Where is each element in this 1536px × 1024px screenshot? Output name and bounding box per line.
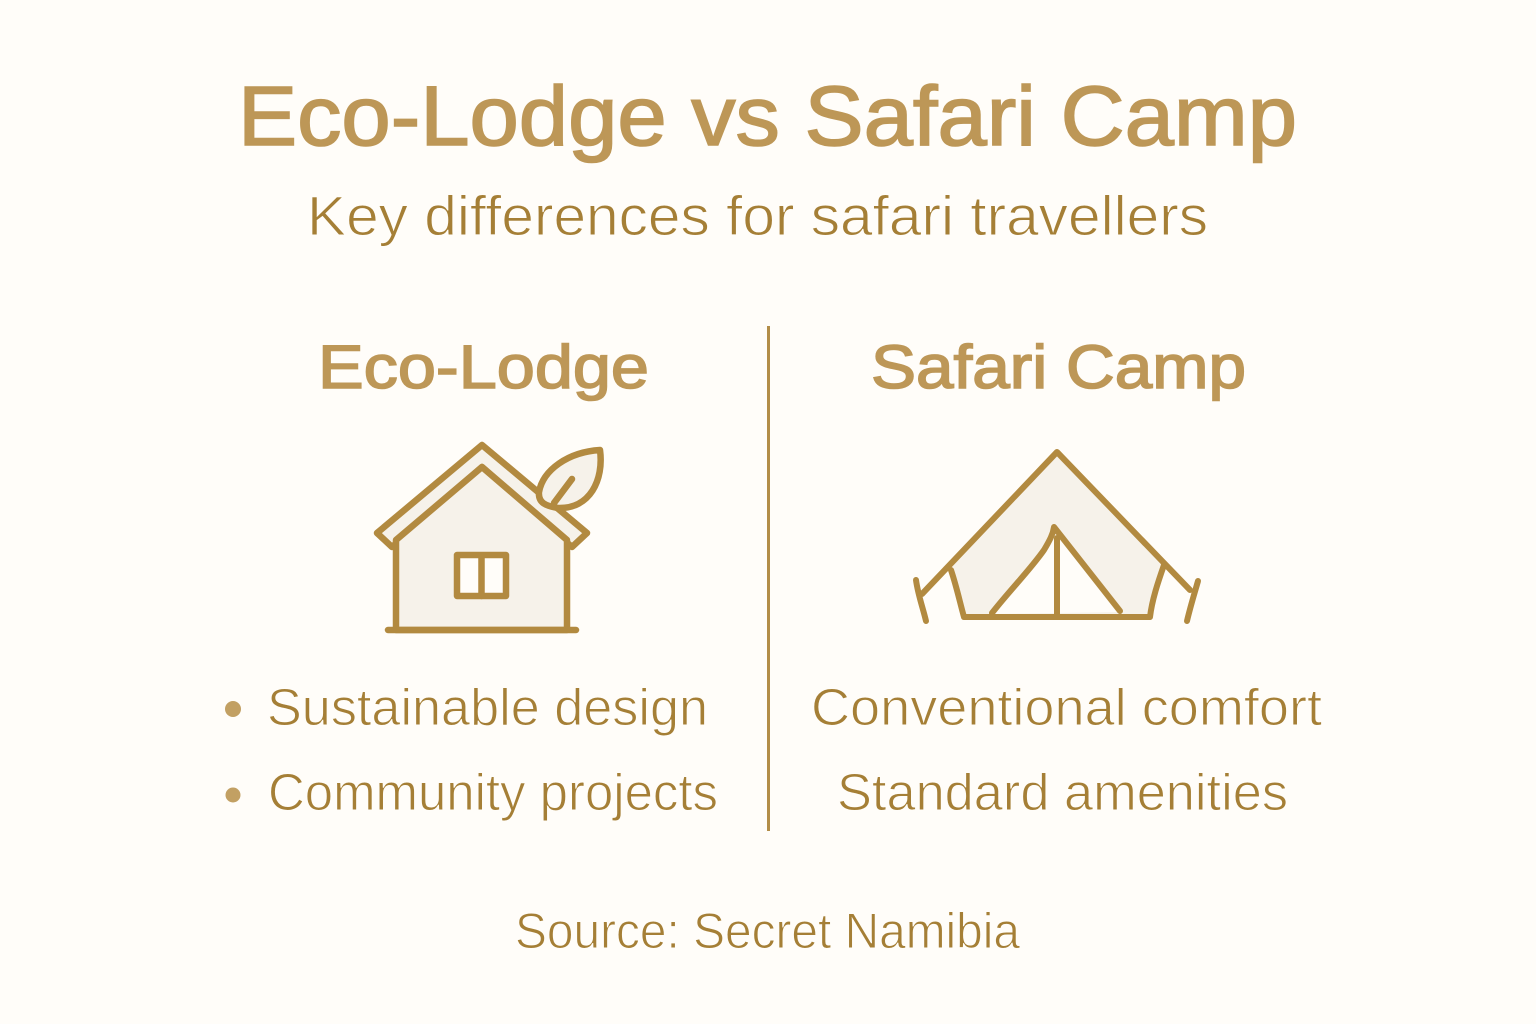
- subtitle: Key differences for safari travellers: [307, 184, 1208, 247]
- feature: standard amenities: Standard amenities: [837, 764, 1288, 822]
- title: Eco-Lodge vs Safari Camp: [238, 69, 1297, 163]
- feature list: safari camp: [811, 679, 1323, 822]
- source note: Source: Secret Namibia: [515, 903, 1020, 959]
- icon: tent: [916, 452, 1198, 621]
- feature: sustainable design: Sustainable design: [267, 679, 708, 737]
- bullet: [226, 788, 240, 802]
- feature: conventional comfort: Conventional comfort: [811, 679, 1323, 737]
- center divider: [767, 326, 770, 831]
- bullet list: eco-lodge features: [225, 679, 718, 822]
- panel: eco-lodge: [225, 333, 718, 822]
- heading: safari camp: Safari Camp: [871, 333, 1246, 401]
- bullet: [225, 701, 241, 717]
- feature: community projects: Community projects: [268, 764, 718, 822]
- panel: safari camp: [811, 333, 1323, 822]
- heading: eco-lodge: Eco-Lodge: [318, 333, 649, 401]
- icon: house with leaf: [377, 445, 601, 630]
